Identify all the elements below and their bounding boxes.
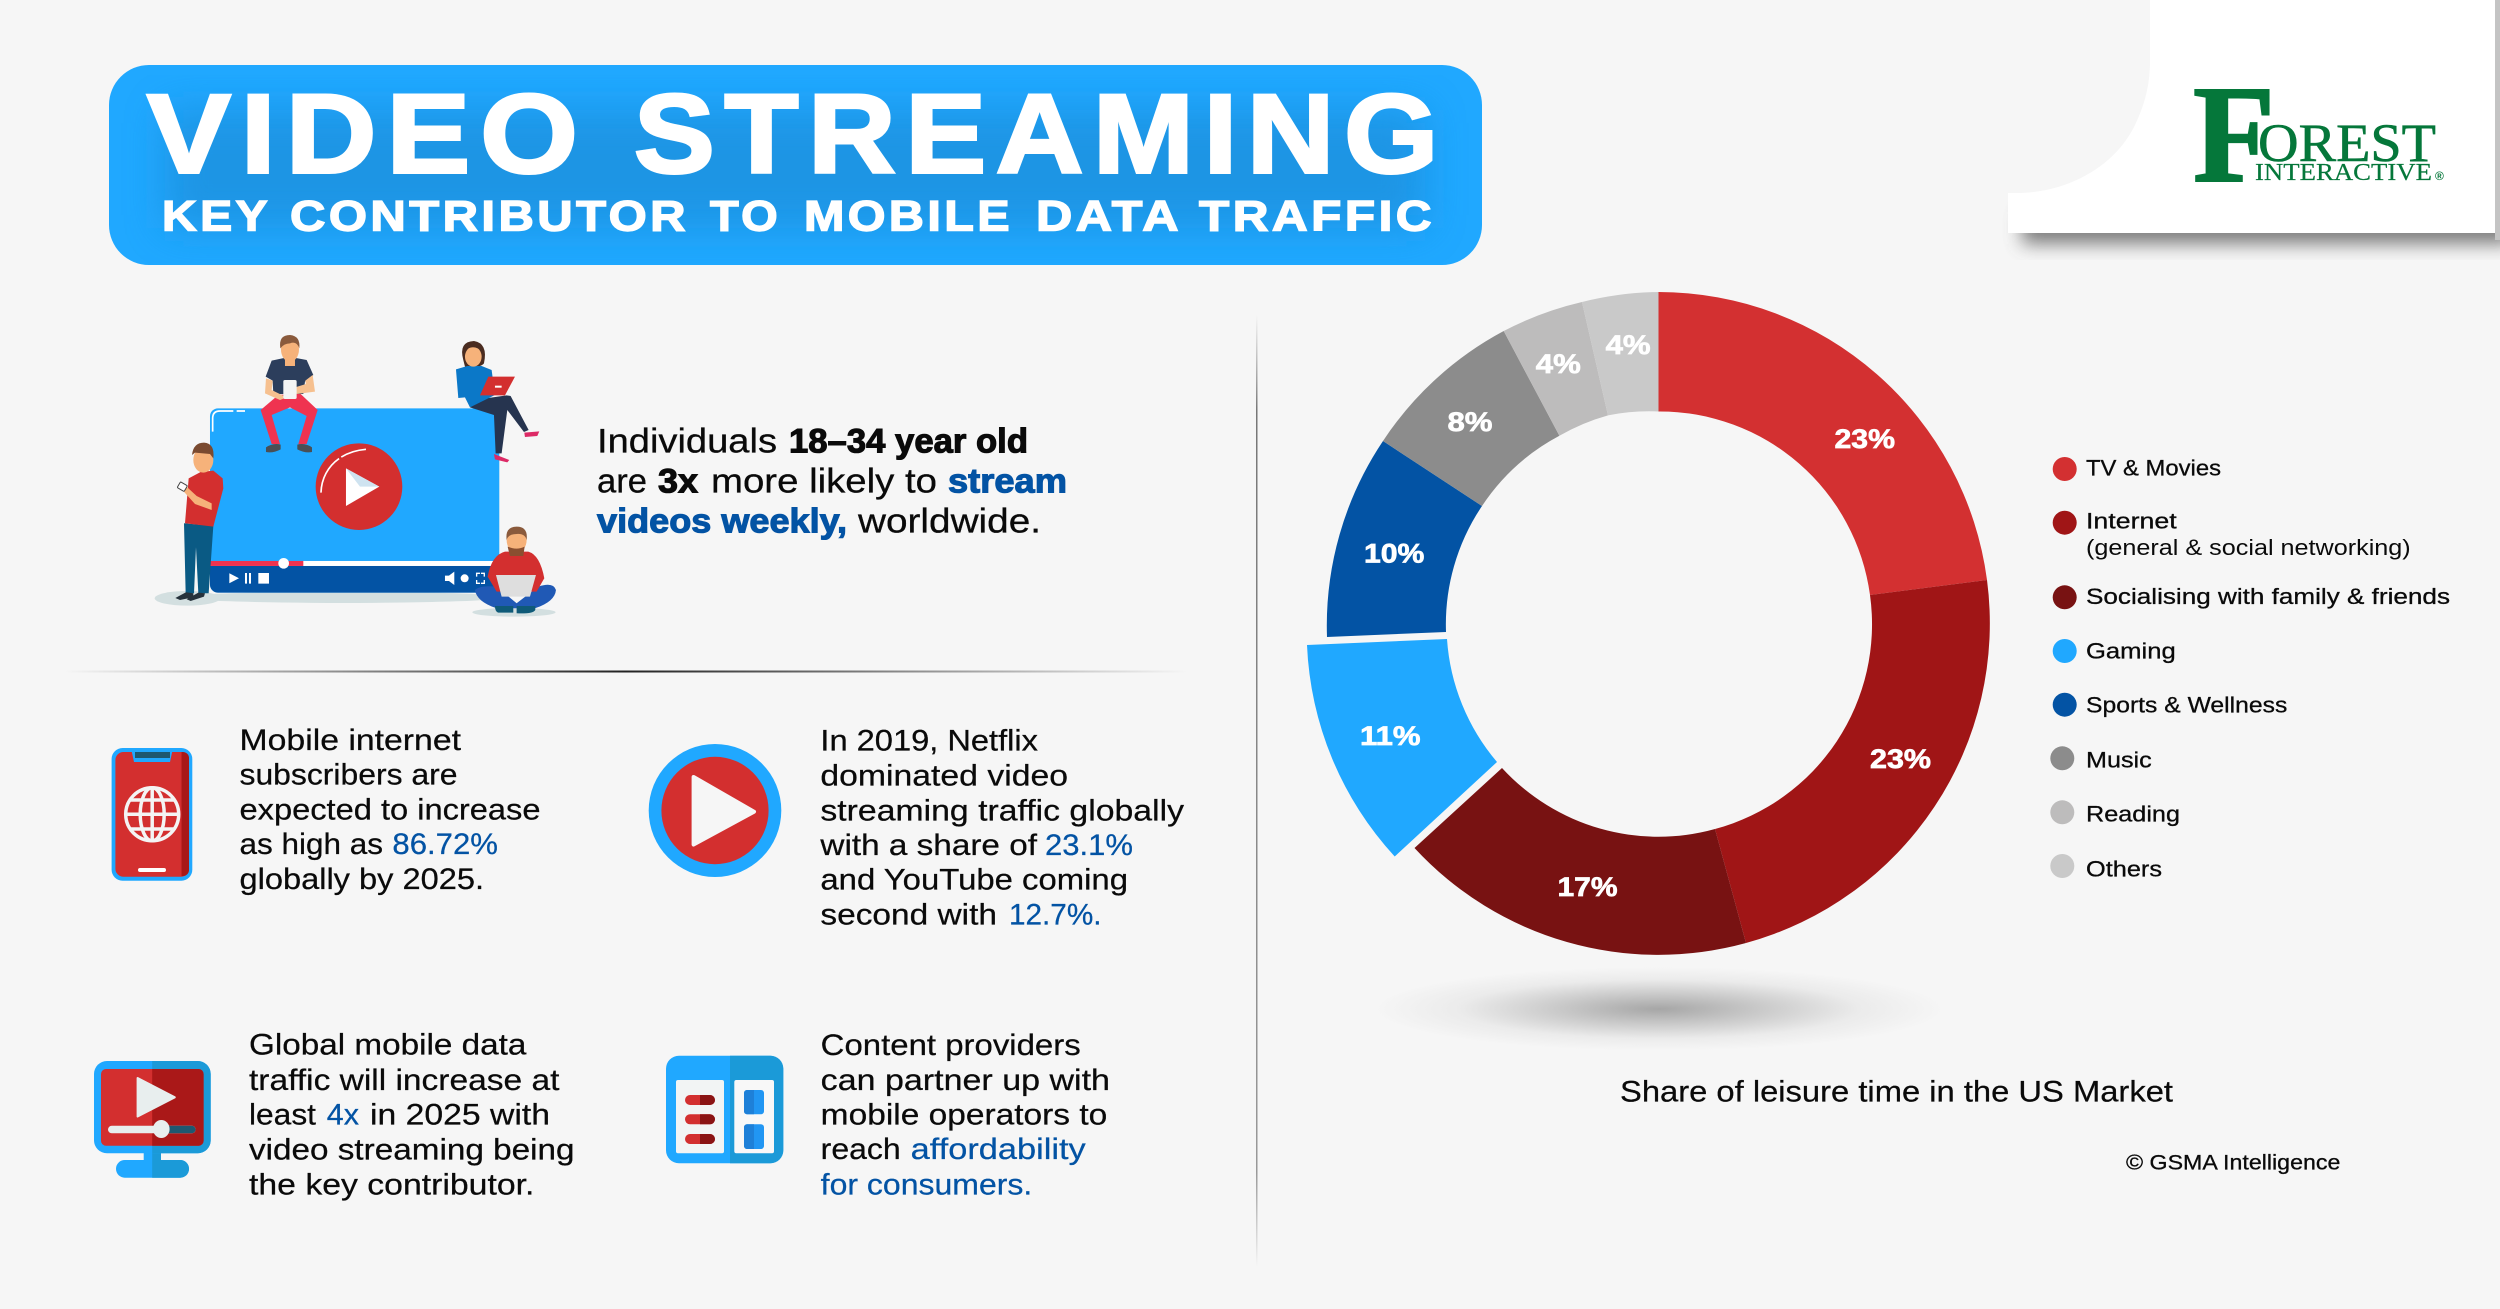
text: global mobile data traffic: video streaming being xyxy=(249,1134,574,1167)
play button xyxy=(316,443,402,530)
text: global mobile data traffic: 4x xyxy=(327,1099,359,1132)
donut value labels: 23% xyxy=(1834,424,1895,454)
subtitle: CONTRIBUTOR xyxy=(290,192,689,240)
intro text: videos weekly, xyxy=(597,503,847,541)
source credit: © GSMA Intelligence xyxy=(2126,1152,2340,1174)
donut floor shadow xyxy=(1374,967,1944,1051)
text: Netflix and YouTube share: with a share of xyxy=(819,829,1038,862)
donut value labels xyxy=(1360,330,1931,902)
legend item: Gaming: Gaming xyxy=(2086,638,2176,663)
text: global mobile data traffic: Global mobile data xyxy=(249,1029,527,1062)
legend item: Internet: (general & social networking) xyxy=(2086,535,2411,560)
logo: Forest Interactive: INTERACTIVE xyxy=(2255,160,2432,186)
legend item: Reading xyxy=(2050,800,2180,827)
legend item: TV & Movies: TV & Movies xyxy=(2086,456,2221,481)
text: content providers: mobile operators to xyxy=(821,1098,1107,1132)
legend item: Gaming xyxy=(2053,638,2176,663)
text: mobile subscribers: expected to increase xyxy=(240,794,540,826)
text: content providers: affordability xyxy=(911,1133,1086,1166)
man with laptop sitting xyxy=(475,527,556,613)
donut value labels: 17% xyxy=(1558,872,1618,902)
text: Netflix and YouTube share xyxy=(819,724,1184,932)
segment: Sports & Wellness xyxy=(1327,441,1482,637)
intro text: are xyxy=(597,463,647,501)
chart caption: Share of leisure time in the US Market xyxy=(1620,1076,2174,1109)
subtitle: MOBILE xyxy=(804,192,1013,240)
text: Netflix and YouTube share: In 2019, Netflix xyxy=(820,724,1038,758)
text: content providers: can partner up with xyxy=(821,1064,1110,1097)
legend item: Sports & Wellness: Sports & Wellness xyxy=(2086,693,2287,718)
text: content providers: Content providers xyxy=(821,1029,1081,1062)
logo: Forest Interactive xyxy=(2193,58,2444,212)
text: Netflix and YouTube share: 23.1% xyxy=(1045,829,1133,862)
intro text: 3x xyxy=(658,463,698,501)
title: VIDEO STREAMING: STREAMING xyxy=(634,72,1448,196)
text: global mobile data traffic: traffic will increase at xyxy=(249,1064,560,1097)
logo: Forest Interactive: ® xyxy=(2435,169,2444,183)
illustration: people around video player xyxy=(155,335,556,617)
segment: Gaming (exploded) xyxy=(1307,639,1497,856)
title banner xyxy=(109,65,1482,265)
block: mobile subscribers xyxy=(112,724,540,896)
woman with laptop xyxy=(456,341,539,462)
vertical divider xyxy=(1256,315,1258,1267)
legend item: Others: Others xyxy=(2086,857,2162,882)
text: global mobile data traffic xyxy=(249,1029,574,1202)
icon: browser panels xyxy=(666,1056,783,1163)
logo: Forest Interactive: F xyxy=(2193,58,2275,212)
subtitle: DATA xyxy=(1036,192,1182,240)
divider xyxy=(64,670,1187,672)
title: VIDEO STREAMING xyxy=(147,72,1448,196)
donut value labels: 8% xyxy=(1448,407,1492,437)
legend item: Socialising: Socialising with family & friends xyxy=(2086,584,2450,609)
subtitle: TRAFFIC xyxy=(1199,192,1435,240)
icon: monitor with video xyxy=(94,1061,211,1178)
legend item: Music xyxy=(2050,746,2152,772)
text: Netflix and YouTube share: and YouTube coming xyxy=(820,864,1128,896)
donut value labels: 11% xyxy=(1360,721,1420,751)
text: Netflix and YouTube share: dominated video xyxy=(820,760,1068,792)
segment: Internet xyxy=(1715,580,1990,943)
floor shadows xyxy=(155,591,556,617)
block: content providers xyxy=(666,1029,1110,1202)
segment: Reading xyxy=(1504,302,1608,436)
text: global mobile data traffic: the key contributor. xyxy=(249,1169,534,1202)
icon: play button xyxy=(649,744,781,877)
person sitting on top xyxy=(261,335,318,452)
intro text: worldwide. xyxy=(857,503,1041,541)
text: content providers: for consumers. xyxy=(821,1168,1032,1202)
text: global mobile data traffic: in 2025 with xyxy=(370,1099,550,1132)
text: global mobile data traffic: least xyxy=(249,1099,317,1132)
subtitle: TO xyxy=(710,192,781,240)
block: Netflix and YouTube share xyxy=(649,724,1184,932)
donut value labels: 4% xyxy=(1606,330,1651,360)
video player xyxy=(210,408,499,593)
man with phone xyxy=(175,443,223,601)
text: mobile subscribers xyxy=(240,724,540,896)
legend item: Internet xyxy=(2053,508,2411,560)
intro text: 18–34 year old xyxy=(789,423,1028,461)
donut value labels: 4% xyxy=(1536,349,1581,379)
segment: Socialising xyxy=(1414,768,1746,955)
legend item: Others xyxy=(2050,854,2162,882)
legend xyxy=(2050,456,2450,882)
legend item: Internet: Internet xyxy=(2086,508,2178,533)
text: Netflix and YouTube share: second with xyxy=(820,898,997,932)
intro text: more likely to xyxy=(711,463,937,501)
intro text xyxy=(597,423,1067,541)
text: mobile subscribers: as high as xyxy=(240,828,383,861)
intro text: Individuals xyxy=(597,423,777,461)
segment: Music xyxy=(1383,331,1559,506)
text: Netflix and YouTube share: streaming traffic globally xyxy=(820,794,1184,828)
text: Netflix and YouTube share: 12.7%. xyxy=(1009,898,1102,932)
legend item: Music: Music xyxy=(2086,747,2152,772)
text: mobile subscribers: Mobile internet xyxy=(240,724,462,757)
icon: phone with globe xyxy=(112,748,192,881)
text: mobile subscribers: globally by 2025. xyxy=(240,863,484,896)
subtitle xyxy=(162,192,1435,240)
logo: Forest Interactive: OREST xyxy=(2258,113,2436,173)
title: VIDEO STREAMING: VIDEO xyxy=(147,72,588,196)
donut value labels: 23% xyxy=(1870,744,1931,774)
text: content providers: reach xyxy=(821,1133,901,1166)
segment: TV & Movies xyxy=(1658,292,1987,595)
segment: Others xyxy=(1582,292,1658,415)
text: content providers xyxy=(821,1029,1110,1202)
text: mobile subscribers: subscribers are xyxy=(240,758,458,792)
logo panel xyxy=(2008,0,2500,244)
block: global mobile data traffic xyxy=(94,1029,574,1202)
legend item: Reading: Reading xyxy=(2086,802,2180,827)
subtitle: KEY xyxy=(162,192,271,240)
intro text: stream xyxy=(948,463,1067,501)
text: mobile subscribers: 86.72% xyxy=(392,828,498,861)
donut chart xyxy=(1307,292,1990,955)
donut value labels: 10% xyxy=(1364,538,1424,568)
